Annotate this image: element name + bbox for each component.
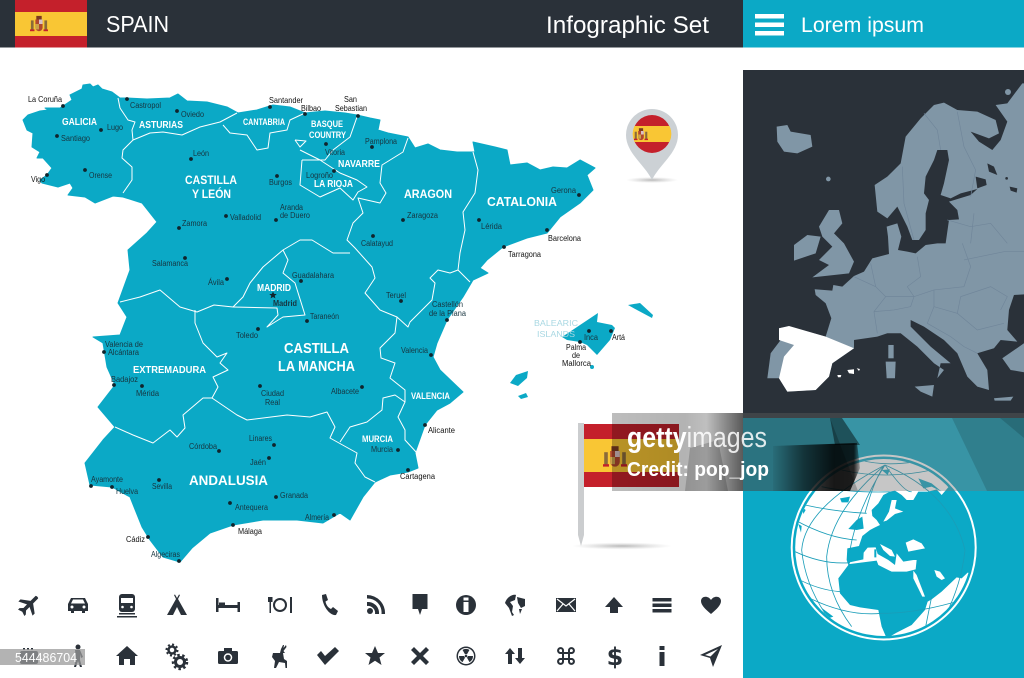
region names: GALICIA	[62, 117, 97, 128]
icon: restaurant	[268, 597, 292, 613]
header bar	[0, 0, 743, 48]
city names: La Coruña	[28, 95, 63, 104]
city names: Guadalahara	[292, 271, 334, 280]
icon: header Spanish flag	[15, 0, 87, 48]
city names: Alicante	[428, 426, 456, 435]
icon: settings gears	[166, 644, 187, 669]
watermark overlay	[612, 413, 1024, 491]
region names: ASTURIAS	[139, 120, 183, 131]
city names: Tarragona	[508, 250, 541, 259]
city names: Albacete	[331, 387, 359, 396]
city names: Taraneón	[310, 312, 339, 321]
city names: Sevilla	[152, 482, 172, 491]
city names: Santiago	[61, 134, 90, 143]
icon: camera	[218, 648, 238, 664]
city names: Gerona	[551, 186, 577, 195]
region names: ISLANDS	[537, 329, 575, 339]
icon: tent	[167, 594, 187, 615]
city names: Antequera	[235, 503, 268, 512]
country borders	[854, 112, 1024, 353]
city names: Granada	[280, 491, 308, 500]
icon: star	[365, 646, 385, 665]
region borders	[115, 98, 478, 482]
icon: up arrow	[605, 597, 623, 613]
watermark credit: Credit: pop_jop	[627, 459, 769, 481]
city names: Ciudad	[261, 389, 284, 398]
globe	[790, 454, 977, 640]
city markers	[45, 97, 613, 563]
icon: hiker	[74, 644, 83, 667]
city names: Ayamonte	[91, 475, 123, 484]
region names: CANTABRIA	[243, 117, 285, 127]
city names: Pamplona	[365, 137, 397, 146]
watermark text: gettyimages	[627, 422, 767, 454]
region names: ANDALUSIA	[189, 472, 268, 488]
icon: info circle	[456, 595, 476, 615]
Balearic islands	[510, 303, 653, 399]
region names: MURCIA	[362, 434, 393, 444]
city names: de la Plana	[429, 309, 467, 318]
oceans	[795, 459, 968, 636]
city names: Murcia	[371, 445, 393, 454]
region names: Y LEÓN	[192, 186, 231, 201]
panel: icon grid	[14, 590, 722, 671]
city names: Oviedo	[181, 110, 204, 119]
region names: NAVARRE	[338, 159, 380, 170]
city names: Madrid	[273, 299, 297, 308]
city names: Zaragoza	[407, 211, 439, 220]
city names: Barcelona	[548, 234, 581, 243]
region names: MADRID	[257, 283, 291, 294]
city names: Real	[265, 398, 280, 407]
icon: up and down arrows	[505, 648, 525, 664]
city names: Valladolid	[230, 213, 261, 222]
region names: COUNTRY	[309, 130, 346, 140]
islands	[777, 89, 1024, 401]
city names: Lérida	[481, 222, 503, 231]
panel: globe background	[743, 413, 1024, 678]
city names: Palma	[566, 343, 586, 352]
icon: airplane	[14, 590, 44, 620]
city names: Zamora	[182, 219, 207, 228]
icon: list	[652, 598, 672, 612]
city names: Sebastian	[335, 104, 367, 113]
region names: CATALONIA	[487, 194, 558, 209]
region names: BALEARIC	[534, 318, 578, 328]
city names: Toledo	[236, 331, 259, 340]
heading: infographic set: Infographic Set	[546, 12, 709, 39]
icon: map marker	[412, 594, 428, 615]
city names: Mérida	[136, 389, 160, 398]
city names: Salamanca	[152, 259, 188, 268]
mainland Europe	[767, 83, 1024, 392]
icon: navigation arrow	[700, 645, 722, 667]
icon: hamburger menu	[755, 14, 784, 36]
menu label: Lorem ipsum	[801, 14, 924, 37]
city names: Ávila	[208, 278, 225, 287]
icon: home	[116, 646, 138, 665]
city names: Aranda	[280, 203, 303, 212]
icon: info letter	[660, 646, 664, 666]
city names: Castellón	[432, 300, 463, 309]
region names: LA MANCHA	[278, 358, 355, 375]
city names: Vigo	[31, 175, 45, 184]
image ID tag: 544486704	[15, 650, 77, 665]
city names: Inca	[584, 333, 599, 342]
header menu panel	[743, 0, 1024, 48]
icon: bed	[216, 598, 240, 612]
icon: check mark	[317, 647, 339, 665]
city names: Linares	[249, 434, 272, 443]
city names: Orense	[89, 171, 112, 180]
graticule	[792, 460, 965, 630]
icon: heart	[701, 597, 721, 614]
city names: Algeciras	[151, 550, 180, 559]
region names: BASQUE	[311, 119, 343, 129]
city names: Teruel	[386, 291, 406, 300]
panel: Spain map	[23, 84, 653, 563]
city names: Cádiz	[126, 535, 145, 544]
city names: León	[193, 149, 209, 158]
icon: RSS	[367, 595, 385, 614]
icon: cross	[411, 647, 429, 665]
region names: CASTILLA	[284, 340, 349, 357]
city names: Mallorca	[562, 359, 592, 368]
icon: train	[117, 594, 137, 618]
city names: San	[344, 95, 357, 104]
city names: Vitoria	[325, 148, 345, 157]
city names: Málaga	[238, 527, 262, 536]
city names: Valencia de	[105, 340, 144, 349]
icon: car	[68, 598, 88, 613]
lakes	[976, 163, 1017, 193]
city names: Burgos	[269, 178, 292, 187]
city names: Lugo	[107, 123, 123, 132]
icon: telephone	[322, 594, 338, 615]
city names: Cartagena	[400, 472, 436, 481]
icon: radiation	[456, 646, 476, 666]
city names: Huelva	[116, 487, 138, 496]
icon: luggage	[20, 648, 38, 664]
city names: Alcántara	[108, 348, 140, 357]
region names	[62, 117, 578, 488]
icon: world	[505, 595, 525, 616]
icon: dollar sign: $	[607, 643, 623, 671]
icon: deer	[272, 645, 287, 668]
heading: country name: SPAIN	[106, 11, 169, 37]
icon: map pin with flag	[626, 109, 678, 183]
region names: ARAGON	[404, 187, 452, 201]
region names: LA RIOJA	[314, 179, 353, 190]
city names: Artá	[612, 333, 625, 342]
icon: envelope	[556, 598, 576, 612]
city names	[28, 95, 625, 559]
city names: Castropol	[130, 101, 161, 110]
city names: Calatayud	[361, 239, 393, 248]
city names: de	[572, 351, 580, 360]
city names: Jaén	[250, 458, 266, 467]
city names: de Duero	[280, 211, 310, 220]
region names: EXTREMADURA	[133, 365, 206, 376]
city names: Bilbao	[301, 104, 321, 113]
region names: VALENCIA	[411, 391, 450, 401]
panel: Europe locator map	[743, 70, 1024, 413]
region names: CASTILLA	[185, 173, 237, 187]
mainland outline	[23, 84, 595, 562]
city names: Córdoba	[189, 442, 218, 451]
city names: Valencia	[401, 346, 428, 355]
city names: Almería	[305, 513, 329, 522]
Spain highlighted	[779, 326, 854, 392]
city names: Santander	[269, 96, 303, 105]
city names: Logroño	[306, 171, 334, 180]
small land details	[798, 469, 942, 618]
icon: command key	[558, 648, 574, 664]
city names: Badajoz	[111, 375, 138, 384]
icon: flag on pole	[572, 423, 679, 550]
